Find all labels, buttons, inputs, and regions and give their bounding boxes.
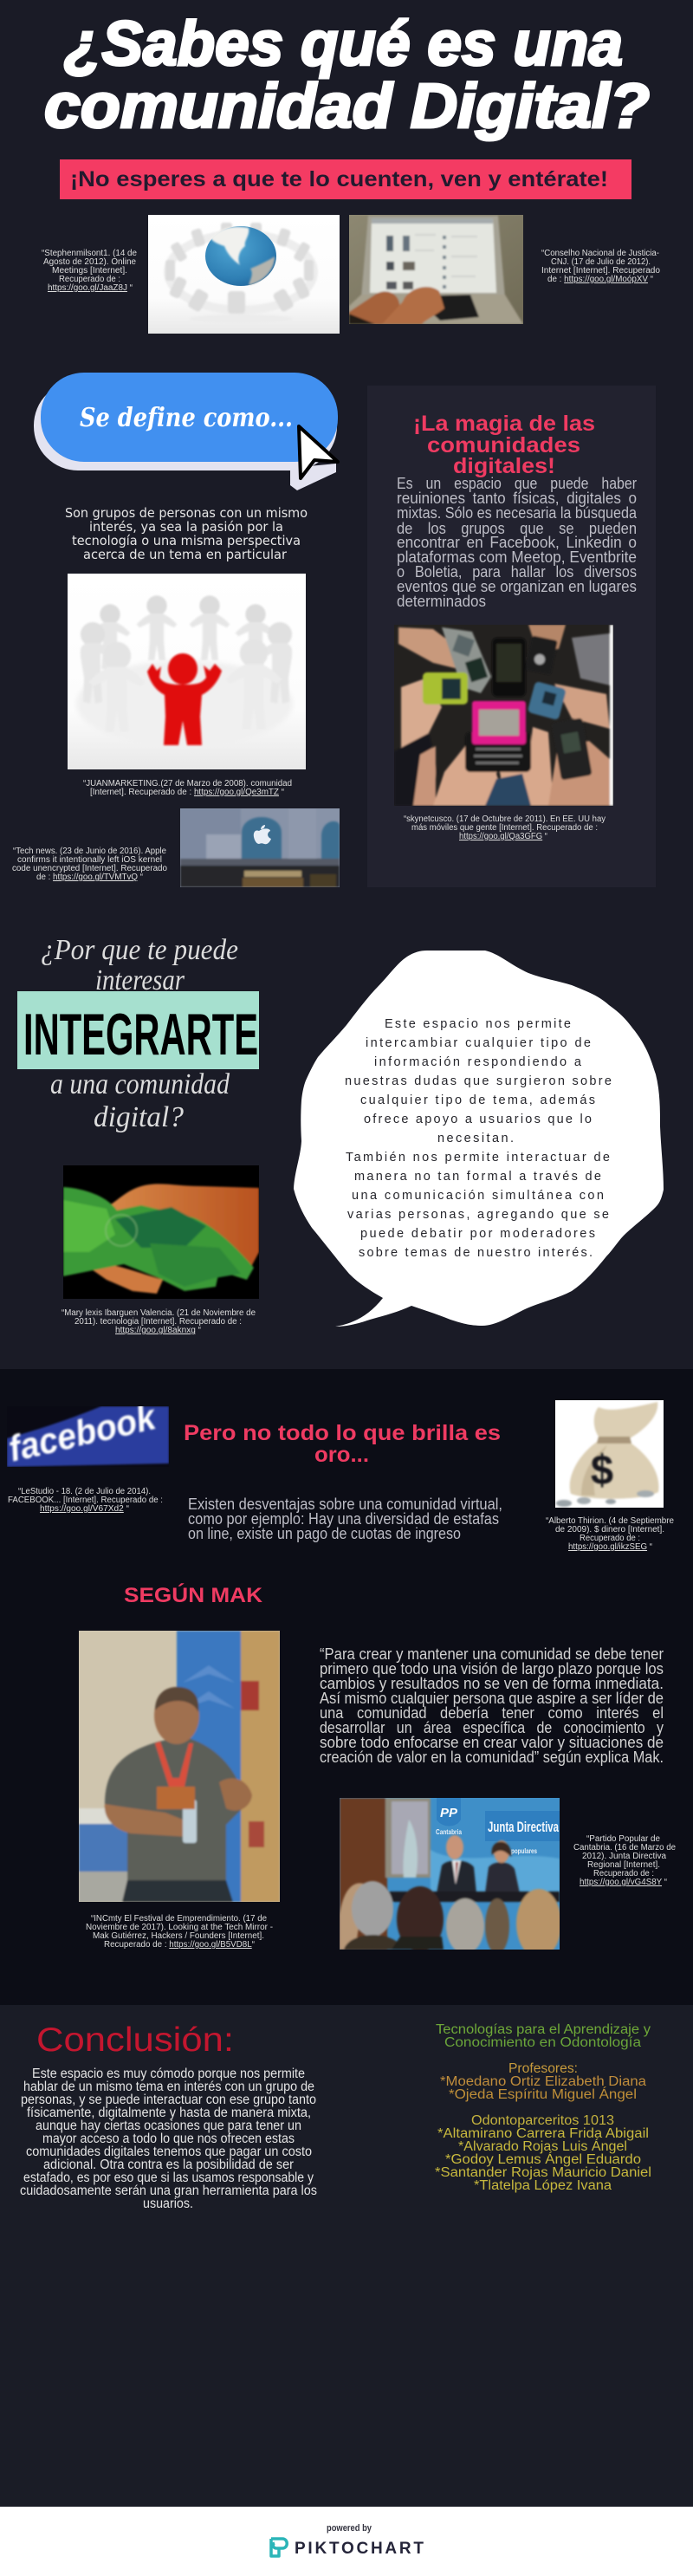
banner: subtitle bbox=[60, 159, 631, 199]
citation: online meetings: https://goo.gl/JaaZ8J “ bbox=[48, 283, 133, 293]
citation: internet laptop: Internet [Internet]. Recuperado bbox=[541, 266, 660, 276]
photo: globe with ring of chairs bbox=[148, 215, 340, 334]
citation: apple: de : https://goo.gl/TVMTvQ “ bbox=[36, 873, 143, 882]
citation: money: Recuperado de : bbox=[580, 1534, 640, 1543]
citation: online meetings bbox=[42, 249, 137, 293]
citation: internet laptop: “Conselho Nacional de Justicia- bbox=[541, 249, 659, 258]
text: definition: acerca de un tema en particular bbox=[83, 547, 288, 562]
heading: la magia: digitales! bbox=[453, 454, 555, 478]
text: conclusión body: personas, y se puede interactuar con ese grupo tanto bbox=[21, 2093, 316, 2107]
photo: junta directiva meeting: PP bbox=[440, 1806, 458, 1820]
citation: junta directiva: Cantabria. (16 de Marzo de bbox=[573, 1843, 676, 1853]
citation: mak bbox=[86, 1914, 273, 1950]
photo: facebook logo: facebook bbox=[4, 1396, 161, 1470]
button: se define como: Se define como... bbox=[80, 403, 293, 433]
footer: piktochart logo bbox=[271, 2523, 424, 2558]
background: upper section bbox=[0, 0, 693, 1369]
heading: la magia: comunidades bbox=[427, 433, 580, 457]
citation: apple: confirms it intentionally left iOS kernel bbox=[17, 855, 162, 865]
citation: junta directiva: Regional [Internet]. bbox=[587, 1860, 660, 1870]
heading: por que te puede interesar: digital? bbox=[94, 1101, 184, 1133]
background: footer bbox=[0, 2507, 693, 2576]
text: panel body: plataformas com Meetop, Eventbrite bbox=[397, 548, 637, 566]
citation: internet laptop bbox=[541, 249, 660, 284]
text: bubble body: También nos permite interactuar de bbox=[346, 1151, 610, 1165]
citation: phones: “skynetcusco. (17 de Octubre de 2011). En EE. UU hay bbox=[404, 814, 606, 824]
text: quote by mak bbox=[320, 1645, 664, 1766]
text: conclusión body: comunidades digitales tenemos que pagar un costo bbox=[26, 2145, 312, 2159]
text: panel body: Es un espacio que puede haber bbox=[397, 475, 637, 492]
citation: phones bbox=[404, 814, 606, 841]
text: panel body: de los grupos que se pueden bbox=[397, 520, 637, 537]
text: desventajas: como por ejemplo: Hay una diversidad de estafas bbox=[188, 1510, 499, 1528]
citation: internet laptop: de : https://goo.gl/MoópXV “ bbox=[547, 275, 653, 284]
heading: por que te puede interesar bbox=[17, 934, 259, 1133]
text: definition: Son grupos de personas con un mismo bbox=[65, 505, 308, 521]
text: quote by mak: sobre todo enfocarse en crear valor y situaciones de bbox=[320, 1734, 664, 1751]
heading: la magia bbox=[413, 412, 595, 478]
citation: facebook: “LeStudio - 18. (2 de Julio de 2014). bbox=[18, 1487, 151, 1496]
panel: la magia de las comunidades bbox=[367, 386, 656, 887]
text: quote by mak: primero que todo una visión de largo plazo porque los bbox=[320, 1660, 664, 1677]
title bbox=[44, 10, 650, 141]
heading: por que te puede interesar: interesar bbox=[95, 964, 185, 996]
heading: por que te puede interesar: a una comunidad bbox=[50, 1068, 230, 1100]
text: credits: Profesores: bbox=[508, 2061, 578, 2076]
heading: conclusión: Conclusión: bbox=[36, 2021, 234, 2059]
button: se define como bbox=[34, 373, 338, 490]
photo: hands typing on a laptop bbox=[349, 215, 523, 324]
citation: internet laptop: CNJ. (17 de Julio de 2012). bbox=[551, 257, 651, 267]
text: quote by mak: creación de valor en la comunidad” según explica Mak. bbox=[320, 1749, 664, 1766]
citation: online meetings: “Stephenmilsont1. (14 de bbox=[42, 249, 137, 258]
icon: mouse cursor bbox=[299, 426, 338, 478]
text: quote by mak: Así mismo cualquier persona que aspire a ser líder de bbox=[320, 1690, 664, 1707]
citation: apple: code unencrypted [Internet]. Recuperado bbox=[12, 864, 167, 873]
text: bubble body: intercambiar cualquier tipo de bbox=[366, 1036, 591, 1050]
citation: phones: más móviles que gente [Internet]. Recuperado de : bbox=[411, 823, 598, 833]
citation: apple: “Tech news. (23 de Junio de 2016). Apple bbox=[13, 847, 166, 856]
footer: piktochart logo: PIKTOCHART bbox=[295, 2540, 424, 2558]
text: panel body: reuiniones tanto físicas, digitales o bbox=[397, 490, 637, 507]
citation: mak: Recuperado de : https://goo.gl/B5VD8L“ bbox=[104, 1940, 255, 1950]
footer: piktochart logo: powered by bbox=[327, 2523, 372, 2534]
citation: people circle bbox=[83, 779, 292, 797]
citation: mak: Noviembre de 2017). Looking at the Tech Mirror - bbox=[86, 1923, 273, 1932]
background: lower dark section bbox=[0, 1369, 693, 2005]
text: quote by mak: una comunidad debería tener como interés el bbox=[320, 1704, 664, 1722]
photo: circle of people with red leader bbox=[68, 574, 306, 769]
text: bubble body: una comunicación simultánea con bbox=[352, 1189, 604, 1203]
citation: facebook bbox=[8, 1487, 163, 1514]
citation: mak: Mak Gutiérrez, Hackers / Founders [Internet]. bbox=[93, 1931, 264, 1941]
text: credits: *Santander Rojas Mauricio Daniel bbox=[435, 2165, 651, 2180]
text: bubble body: Este espacio nos permite bbox=[385, 1017, 571, 1031]
background: conclusion section bbox=[0, 2005, 693, 2507]
text: conclusión body: hablar de un mismo tema en interés con un grupo de bbox=[23, 2080, 314, 2094]
text: panel body: determinados bbox=[397, 593, 486, 610]
text: bubble body bbox=[345, 1017, 612, 1260]
text: conclusión body: físicamente, digitalmente y hasta de manera mixta, bbox=[27, 2106, 311, 2120]
photo: junta directiva meeting bbox=[340, 1798, 560, 1950]
text: credits: *Altamirano Carrera Frida Abigail bbox=[437, 2126, 649, 2141]
banner: integrarte bbox=[17, 991, 259, 1069]
photo: money bag bbox=[555, 1400, 664, 1508]
text: desventajas bbox=[188, 1496, 502, 1542]
text: conclusión body: Este espacio es muy cómodo porque nos permite bbox=[32, 2067, 305, 2081]
heading: por que te puede interesar: ¿Por que te puede bbox=[41, 934, 238, 966]
text: credits: *Godoy Lemus Ángel Eduardo bbox=[445, 2152, 641, 2167]
text: quote by mak: cambios y resultados no se ven de forma inmediata. bbox=[320, 1675, 664, 1692]
citation: handshake: https://goo.gl/8aknxg “ bbox=[115, 1326, 201, 1335]
text: bubble body: necesitan. bbox=[437, 1132, 514, 1145]
banner: integrarte: INTEGRARTE bbox=[23, 1002, 258, 1067]
text: bubble body: información respondiendo a bbox=[374, 1055, 582, 1069]
heading: pero no todo lo que brilla: Pero no todo lo que brilla es bbox=[184, 1421, 501, 1445]
citation: money bbox=[546, 1516, 674, 1552]
text: panel body: eventos que se organizan en lugares bbox=[397, 578, 637, 595]
text: bubble body: ofrece apoyo a usuarios que lo bbox=[364, 1113, 592, 1126]
citation: mak: “INCmty El Festival de Emprendimiento. (17 de bbox=[91, 1914, 267, 1924]
banner: subtitle: ¡No esperes a que te lo cuenten, ven y entérate! bbox=[70, 167, 608, 191]
text: bubble body: manera no tan formal a través de bbox=[354, 1170, 601, 1184]
photo: mak speaking bbox=[79, 1631, 280, 1902]
citation: people circle: “JUANMARKETING.(27 de Marzo de 2008). comunidad bbox=[83, 779, 292, 788]
citation: money: “Alberto Thirion. (4 de Septiembre bbox=[546, 1516, 674, 1526]
citation: junta directiva: “Partido Popular de bbox=[586, 1834, 660, 1844]
citation: handshake: “Mary lexis Ibarguen Valencia. (21 de Noviembre de bbox=[62, 1308, 256, 1318]
citation: handshake bbox=[62, 1308, 256, 1335]
text: bubble body: varias personas, agregando que se bbox=[347, 1208, 609, 1222]
heading: la magia: ¡La magia de las bbox=[413, 412, 595, 436]
text: conclusión body: estafado, es por eso que si las usamos responsable y bbox=[23, 2170, 314, 2185]
text: bubble body: nuestras dudas que surgieron sobre bbox=[345, 1074, 612, 1088]
text: definition bbox=[65, 505, 308, 562]
citation: junta directiva: https://goo.gl/vG4S8Y “ bbox=[580, 1878, 667, 1887]
text: conclusión body bbox=[20, 2067, 317, 2211]
text: conclusión body: mayor acceso a todo lo que nos ofrecen estas bbox=[42, 2132, 295, 2146]
text: quote by mak: “Para crear y mantener una comunidad se debe tener bbox=[320, 1645, 664, 1663]
text: desventajas: Existen desventajas sobre una comunidad virtual, bbox=[188, 1496, 502, 1513]
citation: facebook: https://goo.gl/V67Xd2 “ bbox=[40, 1504, 129, 1514]
text: definition: tecnología o una misma perspectiva bbox=[72, 533, 301, 548]
photo: apple store bbox=[180, 808, 340, 887]
text: conclusión body: usuarios. bbox=[143, 2196, 193, 2211]
text: bubble body: cualquier tipo de tema, además bbox=[360, 1093, 595, 1107]
heading: pero no todo lo que brilla: oro... bbox=[314, 1443, 369, 1467]
citation: junta directiva bbox=[573, 1834, 676, 1887]
text: credits: *Alvarado Rojas Luis Ángel bbox=[458, 2139, 627, 2154]
citation: junta directiva: 2012). Junta Directiva bbox=[582, 1852, 666, 1861]
speech bubble bbox=[294, 951, 664, 1327]
text: credits: *Tlatelpa López Ivana bbox=[474, 2178, 612, 2193]
citation: online meetings: Agosto de 2012). Online bbox=[43, 257, 136, 267]
citation: junta directiva: Recuperado de : bbox=[593, 1869, 654, 1878]
heading: según mak: SEGÚN MAK bbox=[124, 1583, 263, 1607]
text: credits: Odontoparceritos 1013 bbox=[471, 2113, 614, 2128]
text: credits: *Moedano Ortiz Elizabeth Diana bbox=[440, 2074, 646, 2089]
photo: hands holding mobile phones bbox=[394, 625, 613, 806]
photo: human and circuit handshake bbox=[63, 1165, 259, 1299]
photo: money bag: $ bbox=[591, 1448, 613, 1494]
citation: phones: https://goo.gl/Qa3GFG “ bbox=[459, 832, 547, 841]
title: comunidad Digital? bbox=[44, 72, 650, 141]
citation: online meetings: Meetings [Internet]. bbox=[52, 266, 127, 276]
text: panel body: encontrar en Facebook, Linkedin o bbox=[397, 534, 637, 551]
text: credits: Tecnologías para el Aprendizaje y bbox=[436, 2022, 651, 2037]
text: definition: interés, ya sea la pasión por la bbox=[89, 519, 283, 535]
citation: money: de 2009). $ dinero [Internet]. bbox=[555, 1525, 664, 1535]
citation: people circle: [Internet]. Recuperado de : https://goo.gl/Qe3mTZ “ bbox=[90, 788, 284, 797]
text: desventajas: on line, existe un pago de cuotas de ingreso bbox=[188, 1525, 461, 1542]
title: ¿Sabes qué es una bbox=[64, 10, 623, 79]
photo: junta directiva meeting: Cantabria bbox=[436, 1828, 462, 1836]
heading: pero no todo lo que brilla bbox=[184, 1421, 501, 1467]
icon: piktochart mark bbox=[271, 2539, 287, 2556]
photo: junta directiva meeting: populares bbox=[511, 1847, 537, 1855]
citation: online meetings: Recuperado de : bbox=[59, 275, 120, 284]
text: bubble body: puede debatir por moderadores bbox=[360, 1227, 595, 1241]
citation: facebook: FACEBOOK... [Internet]. Recuperado de : bbox=[8, 1496, 163, 1505]
text: conclusión body: cuidadosamente serán una gran herramienta para los bbox=[20, 2183, 317, 2198]
text: credits: Conocimiento en Odontología bbox=[444, 2035, 641, 2050]
citation: apple bbox=[12, 847, 167, 882]
citation: money: https://goo.gl/ikzSEG “ bbox=[568, 1542, 652, 1552]
citation: handshake: 2011). tecnologia [Internet]. Recuperado de : bbox=[74, 1317, 242, 1327]
text: credits bbox=[435, 2022, 651, 2193]
text: conclusión body: adicional. Otra contra es la posibilidad de ser bbox=[43, 2157, 294, 2172]
text: panel body: o Boletia, para hallar los diversos bbox=[397, 563, 637, 581]
text: conclusión body: aunque hay ciertas ocasiones que para tener un bbox=[36, 2119, 301, 2133]
text: panel body: mixtas. Sólo es necesaria la búsqueda bbox=[397, 504, 638, 522]
text: bubble body: sobre temas de nuestro interés. bbox=[359, 1246, 593, 1260]
text: credits: *Ojeda Espíritu Miguel Ángel bbox=[449, 2087, 637, 2102]
text: panel body bbox=[397, 475, 638, 610]
